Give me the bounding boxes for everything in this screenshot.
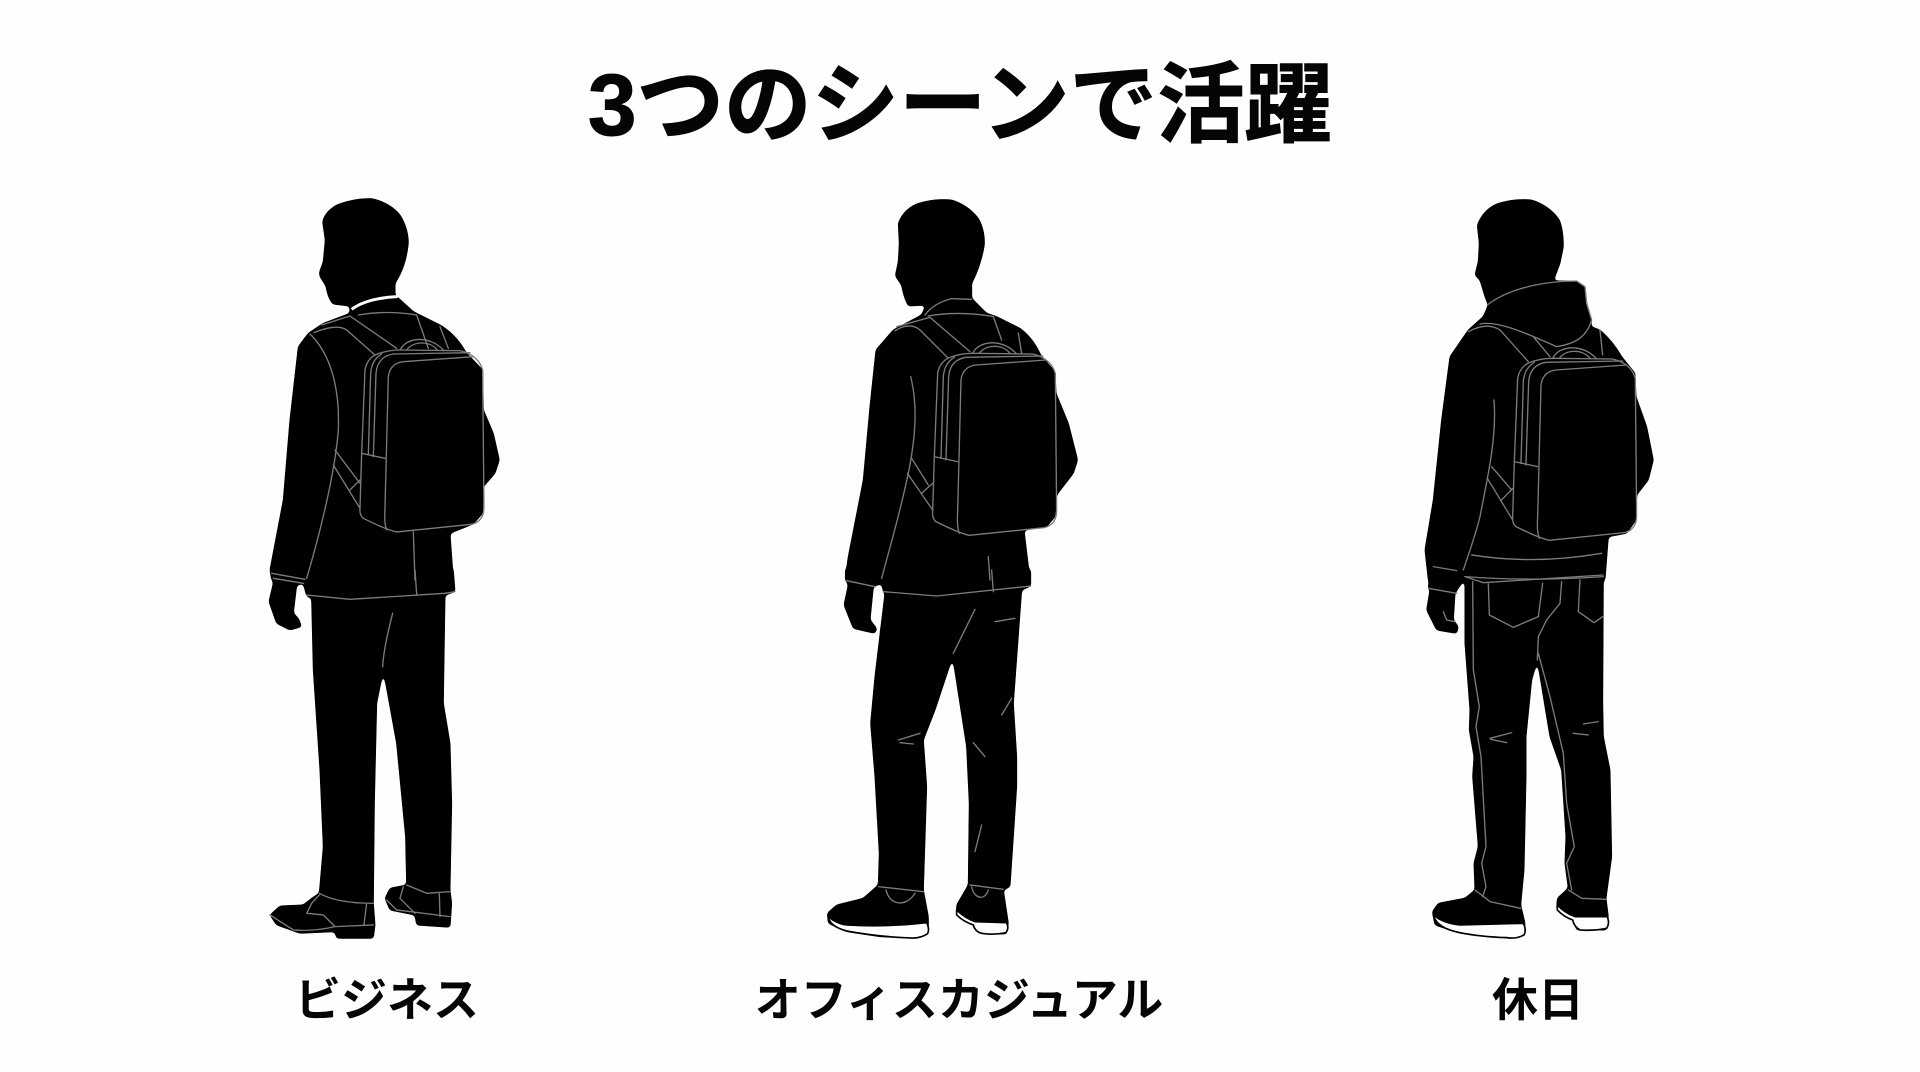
figure: business: [269, 199, 499, 938]
label: office casual: オフィスカジュアル: [755, 974, 1163, 1026]
figure: office casual: [827, 200, 1078, 938]
figure: holiday: [1425, 200, 1653, 938]
label: business: ビジネス: [295, 974, 479, 1026]
label: holiday: 休日: [1492, 974, 1584, 1026]
title: 3つのシーンで活躍: [588, 56, 1332, 154]
